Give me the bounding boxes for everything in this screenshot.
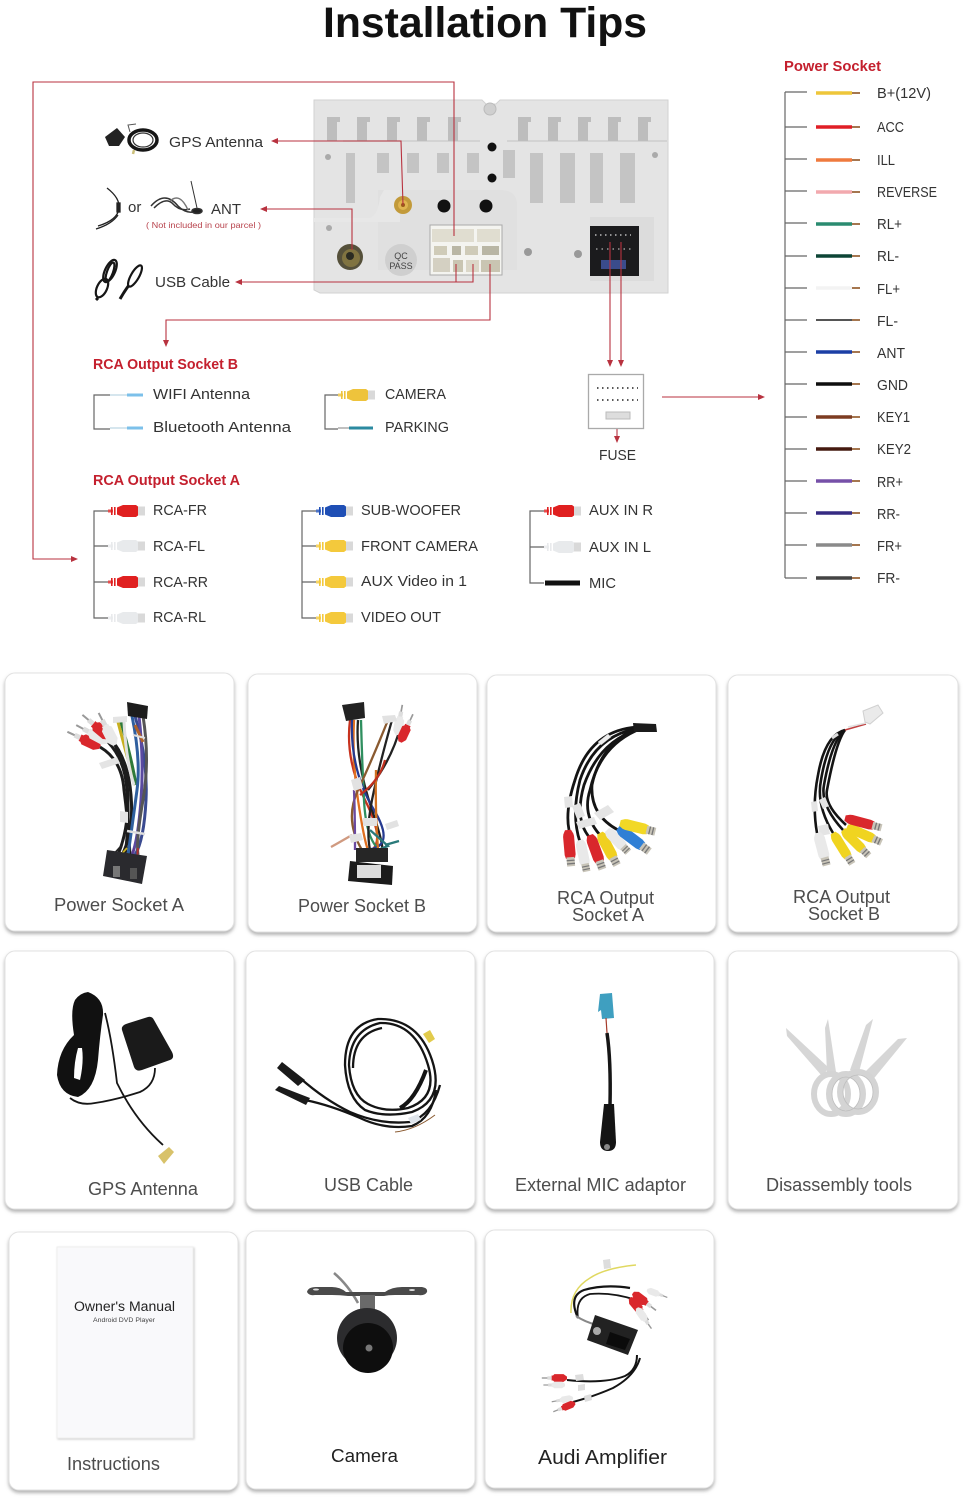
wire labels: FR+ xyxy=(877,538,902,555)
label: PARKING: PARKING xyxy=(385,419,449,436)
tree: RCA audio outputs xyxy=(94,505,145,624)
labels: RCA audio outputs: RCA-RR xyxy=(153,574,208,591)
QC PASS sticker: PASS xyxy=(389,261,413,271)
connector block xyxy=(430,225,502,275)
wire labels: KEY2 xyxy=(877,441,911,458)
camera illustration xyxy=(307,1273,427,1373)
amplifier box xyxy=(587,1315,638,1355)
cables xyxy=(70,1013,163,1145)
label: RCA Output xyxy=(793,886,890,907)
labels: RCA audio outputs: RCA-FL xyxy=(153,538,205,555)
label: USB Cable xyxy=(324,1174,413,1195)
QC PASS sticker: QC xyxy=(394,251,408,261)
antenna puck xyxy=(122,1017,173,1071)
labels: video outputs: AUX Video in 1 xyxy=(361,573,467,590)
harness illustration xyxy=(100,716,146,858)
wire labels: FL+ xyxy=(877,281,900,298)
wire labels: RL- xyxy=(877,248,899,265)
RCA sockets xyxy=(563,818,657,873)
label: Camera xyxy=(331,1445,399,1466)
square power socket xyxy=(590,217,654,281)
label: GPS Antenna xyxy=(88,1178,199,1199)
card: RCA Output Socket A: Socket A xyxy=(572,904,645,925)
manual page xyxy=(57,1247,193,1438)
label: FUSE: FUSE xyxy=(599,447,636,464)
wire tree xyxy=(785,92,860,578)
connector: harness top xyxy=(342,702,365,721)
icon: antenna port xyxy=(337,244,363,270)
panel: head unit rear xyxy=(314,100,668,293)
heading: Power Socket: Power Socket xyxy=(784,59,881,75)
amplifier illustration xyxy=(567,1265,640,1402)
icon: GPS antenna small xyxy=(105,124,157,154)
wire labels: GND xyxy=(877,377,908,394)
text: or: or xyxy=(128,199,141,216)
manual subtitle: Android DVD Player xyxy=(93,1317,156,1324)
wire labels: ACC xyxy=(877,119,904,136)
tags xyxy=(564,796,614,829)
wire labels: ANT xyxy=(877,345,905,362)
red connection lines xyxy=(33,82,765,562)
card: Instructions xyxy=(9,1232,238,1490)
card: Audi Amplifier xyxy=(485,1230,714,1488)
label: Disassembly tools xyxy=(766,1174,912,1195)
heading: RCA Output Socket A: RCA Output Socket A xyxy=(93,473,241,489)
label: Instructions xyxy=(67,1453,160,1474)
labels: aux inputs: AUX IN R xyxy=(589,502,653,519)
heading: RCA Output Socket B: RCA Output Socket B xyxy=(93,357,238,373)
RCA plugs xyxy=(65,710,120,752)
RCA plugs xyxy=(542,1287,668,1415)
wire labels: RL+ xyxy=(877,216,902,233)
label: Bluetooth Antenna: Bluetooth Antenna xyxy=(153,419,292,436)
label: RCA Output xyxy=(557,887,654,908)
card: RCA Output Socket B: Socket B xyxy=(808,903,880,924)
labels: aux inputs xyxy=(589,502,653,592)
blue connector xyxy=(598,993,614,1019)
tags xyxy=(349,777,399,843)
wire labels: ILL xyxy=(877,152,895,169)
card: Disassembly tools xyxy=(728,951,958,1209)
tags xyxy=(811,797,830,836)
box: harness bottom xyxy=(348,848,393,885)
cable bundle xyxy=(568,727,640,842)
manual title: Owner's Manual xyxy=(74,1299,175,1314)
label: WIFI Antenna: WIFI Antenna xyxy=(153,386,251,403)
labels: video outputs: FRONT CAMERA xyxy=(361,538,478,555)
label: Power Socket A xyxy=(54,894,185,915)
RCA plugs xyxy=(382,704,417,744)
labels: video outputs: SUB-WOOFER xyxy=(361,502,461,519)
wire labels: FL- xyxy=(877,313,898,330)
tree: socket B antennas xyxy=(94,395,143,429)
card: External MIC adaptor xyxy=(485,951,714,1209)
title: Installation Tips xyxy=(323,0,647,47)
labels: video outputs: VIDEO OUT xyxy=(361,609,441,626)
icon: GPS gold port xyxy=(394,196,412,214)
card: Power Socket A xyxy=(5,673,234,931)
label: Power Socket B xyxy=(298,895,426,916)
wire labels xyxy=(877,85,937,587)
wire labels: B+(12V) xyxy=(877,85,931,102)
connector xyxy=(633,723,657,732)
cable coil xyxy=(300,1019,440,1127)
tree: aux inputs xyxy=(530,505,581,583)
USB plugs xyxy=(275,1062,310,1105)
note: not included: ( Not included in our parcel ) xyxy=(146,220,261,230)
wire labels: KEY1 xyxy=(877,409,910,426)
icon: ANT car aerial xyxy=(151,181,202,214)
cable bundle xyxy=(815,730,846,833)
label: CAMERA: CAMERA xyxy=(385,386,446,403)
card: USB Cable xyxy=(246,951,475,1209)
icon: USB cable small xyxy=(93,258,144,300)
label: ANT: ANT xyxy=(211,201,241,218)
connector: harness top xyxy=(127,702,148,719)
card: RCA Output Socket B xyxy=(728,675,958,932)
RCA sockets xyxy=(813,813,884,867)
gold connector xyxy=(158,1147,174,1164)
cable coil xyxy=(57,992,103,1097)
tool fan xyxy=(786,1019,907,1114)
icon: fuse box xyxy=(588,374,644,428)
label: External MIC adaptor xyxy=(515,1174,686,1195)
wire labels: RR- xyxy=(877,506,900,523)
card: Camera xyxy=(246,1231,475,1489)
wire labels: FR- xyxy=(877,570,900,587)
tree: camera xyxy=(325,389,375,429)
wire labels: RR+ xyxy=(877,474,903,491)
card: RCA Output Socket A xyxy=(487,675,716,932)
panel: power socket wire list xyxy=(784,59,937,587)
labels: RCA audio outputs xyxy=(153,502,208,626)
label: USB Cable: USB Cable xyxy=(155,274,230,291)
labels: RCA audio outputs: RCA-FR xyxy=(153,502,207,519)
tree: video outputs xyxy=(302,505,353,624)
connector: harness bottom xyxy=(103,850,147,884)
labels: aux inputs: AUX IN L xyxy=(589,539,651,556)
cable and jack xyxy=(607,1033,610,1105)
label: Audi Amplifier xyxy=(538,1447,667,1469)
label: GPS Antenna: GPS Antenna xyxy=(169,134,264,151)
icon: ANT adapter xyxy=(96,188,120,229)
card: Power Socket B xyxy=(248,674,477,932)
connector xyxy=(863,705,883,724)
small white tags xyxy=(99,716,128,823)
QC PASS sticker xyxy=(385,244,417,276)
labels: RCA audio outputs: RCA-RL xyxy=(153,609,206,626)
tags xyxy=(575,1259,611,1402)
card: GPS Antenna xyxy=(5,951,234,1209)
labels: aux inputs: MIC xyxy=(589,575,616,592)
harness illustration xyxy=(331,720,401,852)
wire labels: REVERSE xyxy=(877,184,937,201)
labels: video outputs xyxy=(361,502,478,626)
tag and yellow connector xyxy=(408,1114,421,1124)
